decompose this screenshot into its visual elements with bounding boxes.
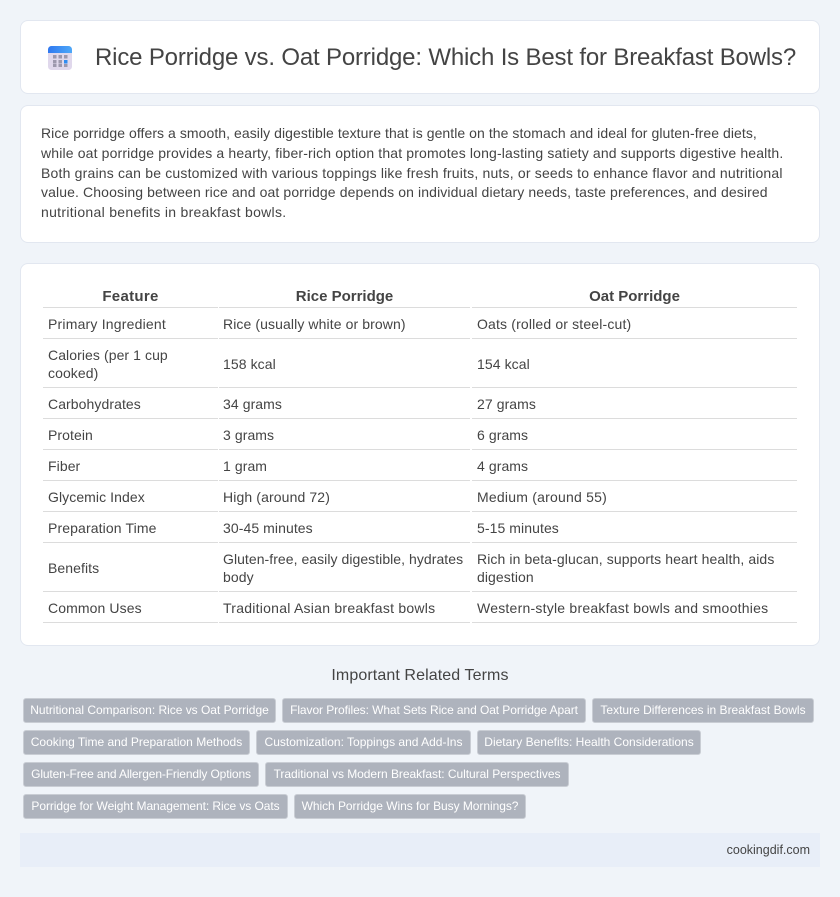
intro text: while oat porridge provides a hearty, fiber-rich option that promotes long-lasting satiety and supports digestive health. (41, 145, 783, 161)
comparison table: 158 kcal (223, 356, 276, 372)
intro card (20, 105, 820, 243)
comparison table (43, 288, 797, 623)
title: Rice Porridge vs. Oat Porridge: Which Is Best for Breakfast Bowls? (95, 44, 796, 71)
comparison table: digestion (477, 569, 534, 585)
related term tags: Flavor Profiles: What Sets Rice and Oat Porridge Apart (290, 703, 578, 717)
comparison table: 1 gram (223, 458, 267, 474)
related terms heading: Important Related Terms (331, 667, 509, 684)
intro text: nutritional benefits in breakfast bowls. (41, 204, 286, 220)
comparison table: Rice (usually white or brown) (223, 316, 406, 332)
comparison table: Feature (102, 288, 159, 305)
comparison table panel (20, 263, 820, 646)
footer bar (20, 833, 820, 867)
comparison table: 4 grams (477, 458, 528, 474)
comparison table: 154 kcal (477, 356, 530, 372)
comparison table: Calories (per 1 cup (48, 347, 168, 363)
comparison table: Oat Porridge (589, 288, 680, 305)
comparison table: High (around 72) (223, 489, 330, 505)
comparison table: Medium (around 55) (477, 489, 607, 505)
related term tags: Gluten-Free and Allergen-Friendly Options (31, 767, 251, 781)
icon: calendar (48, 46, 72, 70)
comparison table: Carbohydrates (48, 396, 141, 412)
comparison table: Primary Ingredient (48, 316, 166, 332)
comparison table: 34 grams (223, 396, 282, 412)
comparison table: Gluten-free, easily digestible, hydrates (223, 551, 463, 567)
comparison table: Preparation Time (48, 520, 157, 536)
footer source text: cookingdif.com (727, 843, 810, 857)
comparison table: cooked) (48, 365, 98, 381)
intro text: Both grains can be customized with various toppings like fresh fruits, nuts, or seeds to enhance flavor and nutritional (41, 165, 783, 181)
comparison table: 30-45 minutes (223, 520, 313, 536)
comparison table: body (223, 569, 254, 585)
intro text (41, 125, 783, 220)
intro text: Rice porridge offers a smooth, easily digestible texture that is gentle on the stomach and ideal for gluten-free diets, (41, 125, 757, 141)
comparison table: Benefits (48, 560, 99, 576)
comparison table: Glycemic Index (48, 489, 145, 505)
comparison table: Common Uses (48, 600, 142, 616)
intro text: value. Choosing between rice and oat porridge depends on individual dietary needs, taste preferences, and desired (41, 184, 768, 200)
related term tags: Traditional vs Modern Breakfast: Cultural Perspectives (274, 767, 560, 781)
related term tags: Customization: Toppings and Add-Ins (265, 735, 462, 749)
related term tags: Nutritional Comparison: Rice vs Oat Porridge (30, 703, 269, 717)
comparison table: Traditional Asian breakfast bowls (223, 600, 435, 616)
comparison table: Rice Porridge (296, 288, 393, 305)
comparison table: Western-style breakfast bowls and smoothies (477, 600, 768, 616)
comparison table: 6 grams (477, 427, 528, 443)
comparison table: Protein (48, 427, 93, 443)
header card (20, 20, 820, 94)
related term tags: Cooking Time and Preparation Methods (31, 735, 242, 749)
comparison table: 5-15 minutes (477, 520, 559, 536)
comparison table: Rich in beta-glucan, supports heart health, aids (477, 551, 774, 567)
related term tags (23, 698, 814, 819)
comparison table: Oats (rolled or steel-cut) (477, 316, 631, 332)
related term tags: Texture Differences in Breakfast Bowls (600, 703, 806, 717)
related term tags: Porridge for Weight Management: Rice vs Oats (31, 799, 280, 813)
related term tags: Which Porridge Wins for Busy Mornings? (302, 799, 518, 813)
comparison table: Fiber (48, 458, 80, 474)
related term tags: Dietary Benefits: Health Considerations (484, 735, 694, 749)
comparison table: 3 grams (223, 427, 274, 443)
comparison table: 27 grams (477, 396, 536, 412)
